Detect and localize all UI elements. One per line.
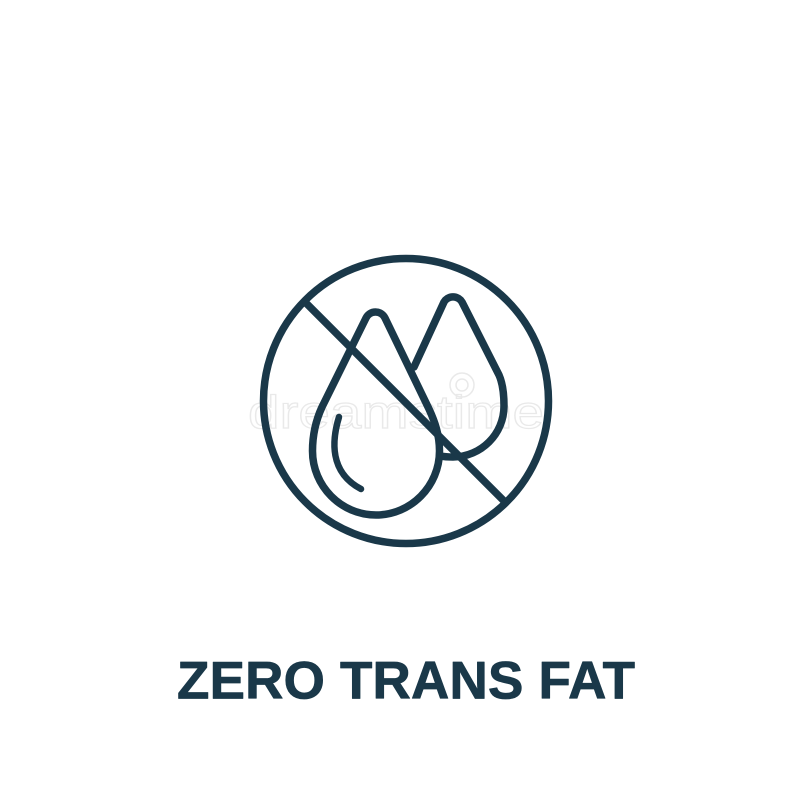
icon: front oil drop xyxy=(312,312,440,515)
watermark: dreamstime xyxy=(248,386,544,438)
title: ZERO TRANS FAT xyxy=(177,652,635,710)
icon: back oil drop xyxy=(414,297,504,457)
icon: prohibition slash xyxy=(305,302,505,502)
icon: no trans fat xyxy=(264,258,548,544)
icon: prohibition circle xyxy=(264,258,548,544)
watermark xyxy=(248,373,544,438)
icon: drop highlight xyxy=(334,417,361,489)
